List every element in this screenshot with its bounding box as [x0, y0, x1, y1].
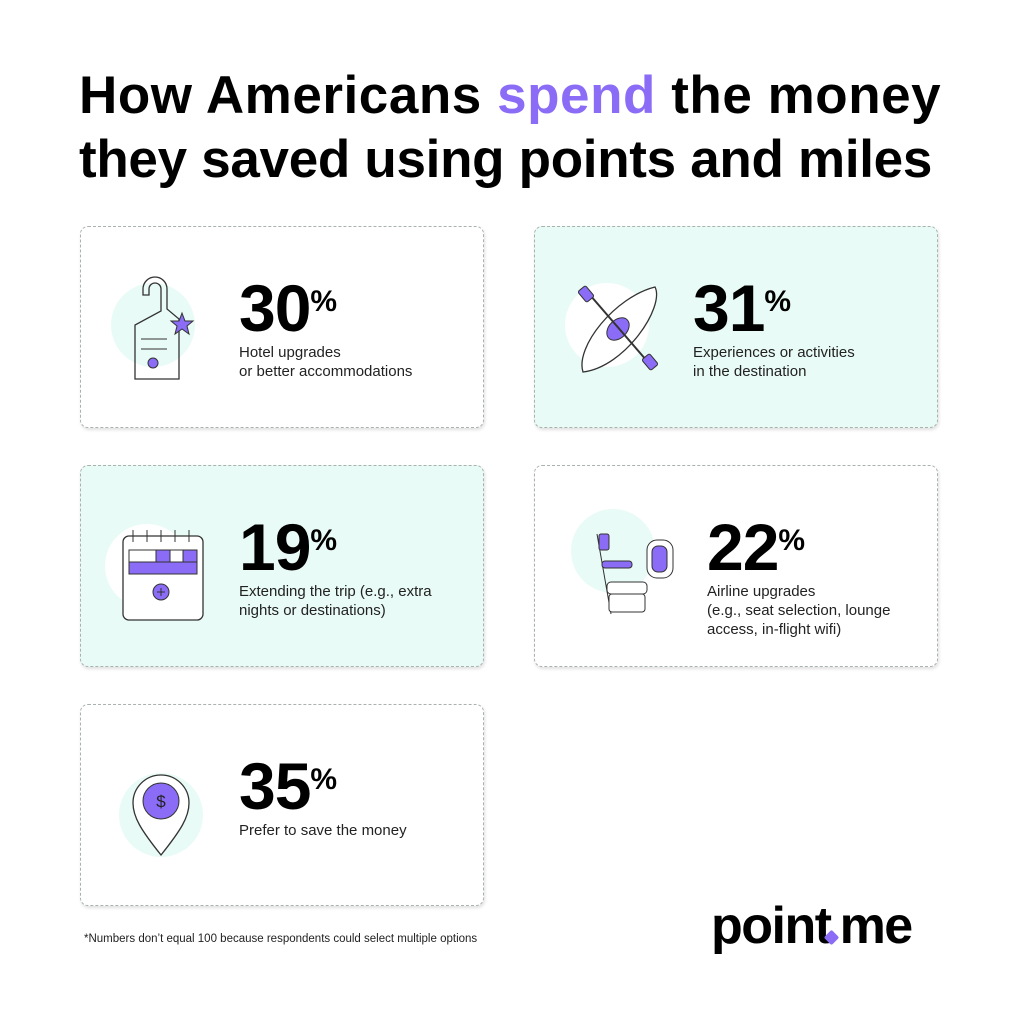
stat: 31% [693, 271, 790, 345]
label [707, 583, 890, 638]
logo: pointme [711, 897, 912, 955]
label: Airline upgrades [707, 583, 815, 600]
panel: save money [80, 704, 484, 906]
icon: location pin dollar: $ [156, 792, 166, 811]
label: Experiences or activities [693, 344, 855, 361]
panel: experiences [534, 226, 938, 428]
title [79, 66, 941, 189]
title: How Americans spend the money [79, 66, 941, 125]
icon: airplane seat [571, 509, 674, 614]
icon: calendar [105, 524, 204, 621]
label [239, 344, 412, 380]
footnote: *Numbers don’t equal 100 because respondents could select multiple options [84, 933, 477, 945]
stat: 35% [239, 749, 336, 823]
icon: door hanger [111, 276, 195, 380]
label [693, 344, 855, 380]
panel: airline upgrades [534, 465, 938, 667]
label [239, 583, 432, 619]
stat: 30% [239, 271, 336, 345]
label: Prefer to save the money [239, 822, 407, 839]
label: in the destination [693, 363, 806, 380]
icon: location pin dollar [119, 773, 203, 857]
label: nights or destinations) [239, 602, 386, 619]
title: they saved using points and miles [79, 130, 932, 189]
panel: hotel upgrades [80, 226, 484, 428]
label: Hotel upgrades [239, 344, 341, 361]
stat: 19% [239, 510, 336, 584]
icon: kayak [565, 283, 658, 373]
label: Extending the trip (e.g., extra [239, 583, 432, 600]
stat: 22% [707, 510, 804, 584]
label: access, in-flight wifi) [707, 621, 841, 638]
panel: extending trip [80, 465, 484, 667]
label: (e.g., seat selection, lounge [707, 602, 890, 619]
label: or better accommodations [239, 363, 412, 380]
